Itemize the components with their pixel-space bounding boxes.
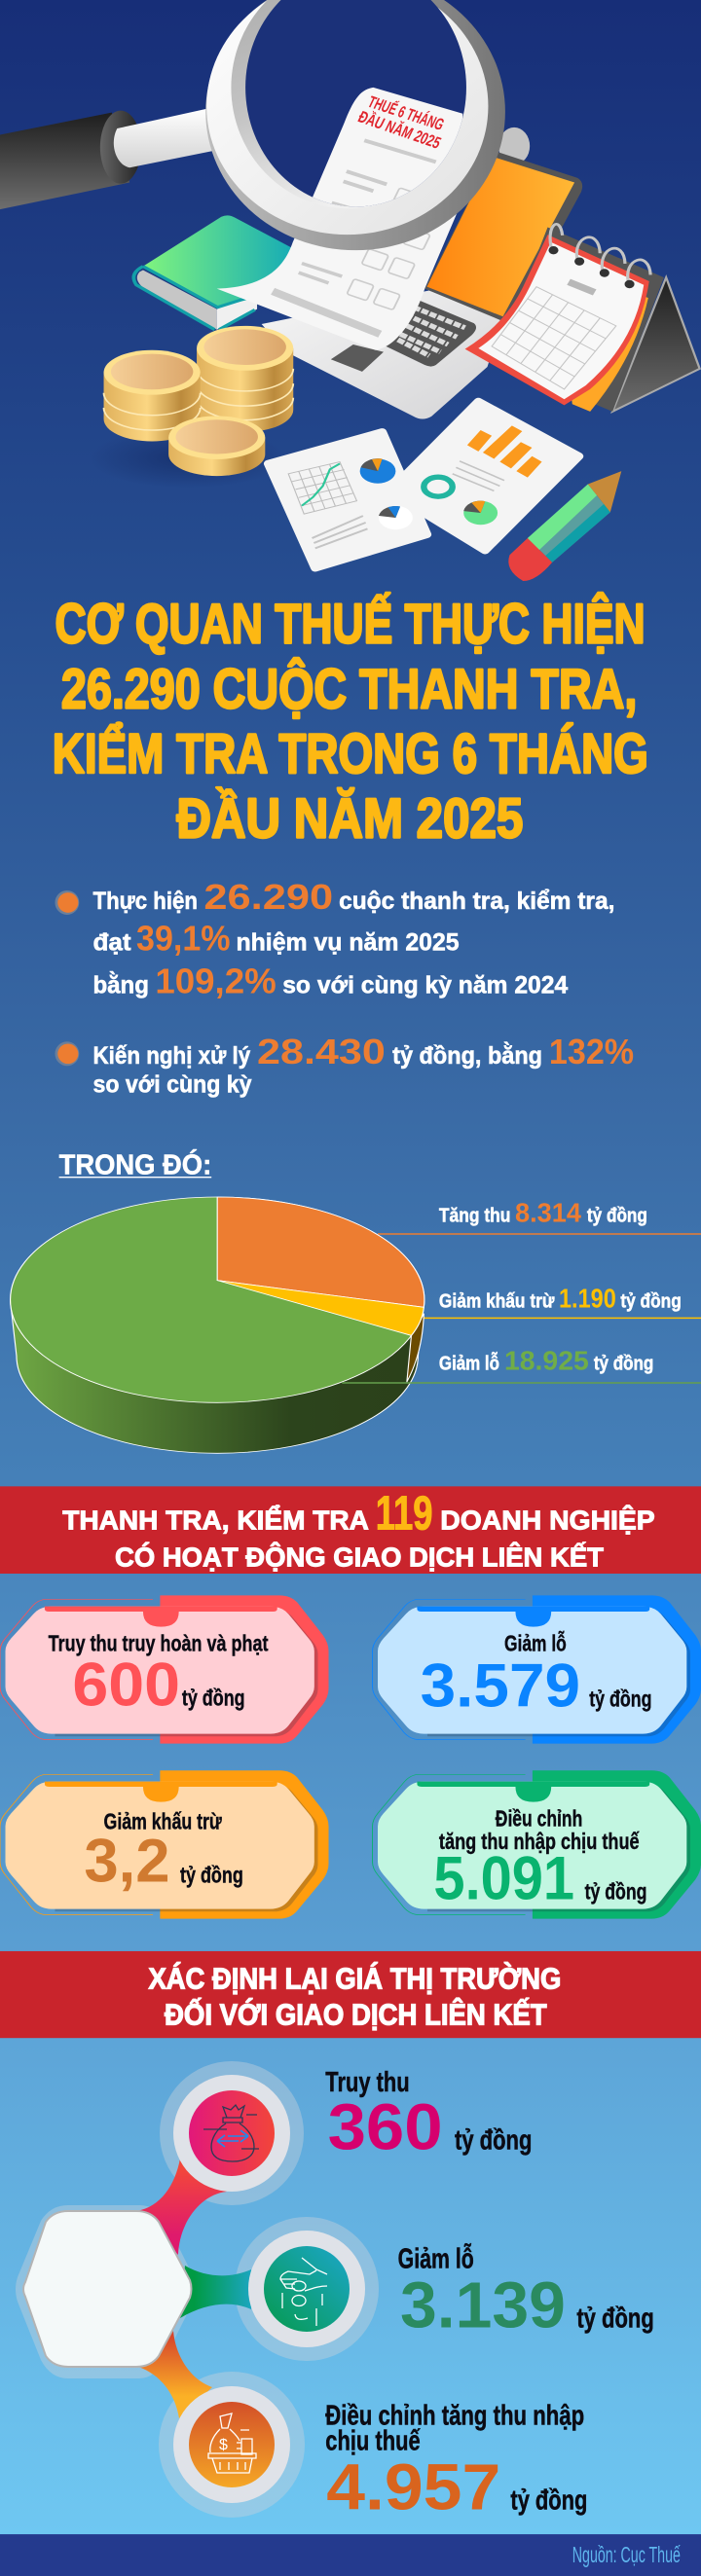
- inspections text: [93, 878, 614, 1000]
- card: truy thu: tỷ đồng: [182, 1686, 245, 1710]
- receipt title: THUẾ 6 THÁNG: [365, 92, 447, 133]
- card: giam lo: 3.579: [421, 1651, 580, 1720]
- handling text: Kiến nghị xử lý: [93, 1042, 250, 1070]
- label: giam lo: 18.925: [504, 1346, 589, 1376]
- dieu chinh figure: 4.957: [326, 2450, 500, 2523]
- handling text: [93, 1033, 634, 1099]
- enterprises section: [0, 1486, 701, 1919]
- circle: hand and coins icon: [248, 2231, 365, 2347]
- handling text: 132%: [549, 1033, 634, 1071]
- inspections text: so với cùng kỳ năm 2024: [282, 972, 568, 999]
- banner: 119 enterprises: [0, 1486, 701, 1574]
- shadow under objects: [90, 428, 286, 488]
- circle: basket icon: $: [219, 2437, 228, 2453]
- banner: market price: ĐỐI VỚI GIAO DỊCH LIÊN KẾT: [165, 1996, 547, 2031]
- heading: trong do: TRONG ĐÓ:: [59, 1148, 211, 1180]
- banner: 119 enterprises: THANH TRA, KIỂM TRA: [62, 1506, 369, 1536]
- footer source band: [0, 2534, 701, 2576]
- label: giam lo: [439, 1346, 653, 1376]
- label: giam lo: Giảm lỗ: [439, 1350, 499, 1374]
- report sheet with charts: [269, 432, 427, 568]
- hexagon hub: [23, 2211, 191, 2367]
- bullet point two: [55, 1041, 79, 1066]
- laptop: [262, 151, 582, 419]
- magnifier ring: [205, 0, 505, 250]
- truy thu figure: Truy thu: [325, 2066, 410, 2097]
- inspections text: đạt: [93, 929, 131, 957]
- circle: bag icon: [173, 2075, 290, 2192]
- label: tang thu: 8.314: [515, 1198, 581, 1228]
- giam lo figure: 3.139: [400, 2268, 566, 2341]
- card: dieu chinh: tỷ đồng: [585, 1879, 646, 1905]
- inspections text: 26.290: [203, 878, 333, 917]
- book: [133, 215, 295, 330]
- banner: 119 enterprises: 119: [376, 1487, 433, 1540]
- dieu chinh figure: chịu thuế: [325, 2425, 421, 2456]
- main title: ĐẦU NĂM 2025: [176, 787, 523, 850]
- card: truy thu: 600: [72, 1651, 180, 1719]
- handling text: so với cùng kỳ: [93, 1071, 252, 1099]
- truy thu figure: 360: [328, 2090, 443, 2163]
- icon: basket of money: [208, 2413, 256, 2473]
- icon: hand dropping coins: [280, 2258, 327, 2326]
- icon: money bag with arrows: [203, 2105, 259, 2161]
- label: giam khau tru: [439, 1285, 682, 1314]
- dieu chinh figure: Điều chỉnh tăng thu nhập: [325, 2400, 584, 2431]
- card: truy thu: Truy thu truy hoàn và phạt: [49, 1631, 269, 1656]
- inspections text: Thực hiện: [93, 888, 198, 915]
- inspections text: nhiệm vụ năm 2025: [236, 929, 460, 957]
- card: giam lo: Giảm lỗ: [504, 1631, 567, 1656]
- report sheet with bars: [389, 402, 579, 551]
- inspections text: cuộc thanh tra, kiểm tra,: [339, 888, 614, 915]
- giam lo figure: tỷ đồng: [576, 2303, 654, 2334]
- hero illustration: [0, 0, 700, 581]
- giam lo figure: [398, 2242, 654, 2341]
- card: giam lo: tỷ đồng: [589, 1687, 652, 1711]
- connector to top circle: [136, 2159, 227, 2255]
- yellow leader line: [423, 1316, 701, 1321]
- giam lo figure: Giảm lỗ: [398, 2242, 474, 2274]
- green leader line: [342, 1381, 701, 1385]
- inspections text: bằng: [93, 970, 149, 999]
- card: giam khau tru: Giảm khấu trừ: [104, 1809, 222, 1833]
- label: tang thu: [439, 1198, 647, 1228]
- hub diagram: [16, 2061, 379, 2518]
- circle: basket icon: [173, 2386, 290, 2503]
- banner: market price: XÁC ĐỊNH LẠI GIÁ THỊ TRƯỜNG: [148, 1961, 561, 1995]
- label: giam lo: tỷ đồng: [594, 1352, 653, 1374]
- connector to bottom circle: [138, 2331, 212, 2418]
- main title: [53, 593, 648, 850]
- paper seen through the lens: [313, 88, 463, 206]
- market price figures: [0, 2066, 701, 2576]
- inspections text: 39,1%: [136, 920, 230, 959]
- card: giam khau tru: 3,2: [84, 1827, 169, 1895]
- label: giam khau tru: Giảm khấu trừ: [439, 1289, 554, 1313]
- calendar: [465, 224, 700, 412]
- label: tang thu: tỷ đồng: [587, 1204, 647, 1226]
- dieu chinh figure: [325, 2400, 587, 2523]
- card: giam khau tru: [0, 1770, 329, 1919]
- key figures: [55, 878, 634, 1099]
- 3D pie chart: [11, 1197, 424, 1453]
- card: truy thu: [0, 1595, 329, 1744]
- inspections text: 109,2%: [155, 962, 277, 1000]
- dieu chinh figure: tỷ đồng: [510, 2485, 587, 2516]
- truy thu figure: tỷ đồng: [455, 2124, 532, 2156]
- card: giam khau tru: tỷ đồng: [180, 1863, 243, 1887]
- pencil: [508, 471, 621, 581]
- label: giam khau tru: 1.190: [559, 1285, 616, 1314]
- orange leader line: [378, 1232, 701, 1236]
- breakdown section: [11, 1148, 701, 1453]
- bullet point one: [55, 890, 79, 915]
- card: giam lo: [373, 1595, 701, 1744]
- tax receipt paper: [217, 88, 462, 350]
- label: tang thu: Tăng thu: [439, 1204, 510, 1226]
- card: dieu chinh: 5.091: [433, 1844, 574, 1913]
- handling text: tỷ đồng, bằng: [392, 1040, 542, 1070]
- magnifier handle: [0, 108, 530, 209]
- handling text: 28.430: [257, 1033, 386, 1071]
- banner: market price: [0, 1951, 701, 2038]
- card: dieu chinh: [373, 1770, 701, 1919]
- receipt subtitle: ĐẦU NĂM 2025: [355, 107, 444, 152]
- halos: [16, 2061, 379, 2518]
- card: dieu chinh: Điều chỉnh: [496, 1806, 582, 1832]
- coin stacks: [104, 326, 293, 476]
- truy thu figure: [325, 2066, 532, 2163]
- connector to middle circle: [180, 2266, 251, 2318]
